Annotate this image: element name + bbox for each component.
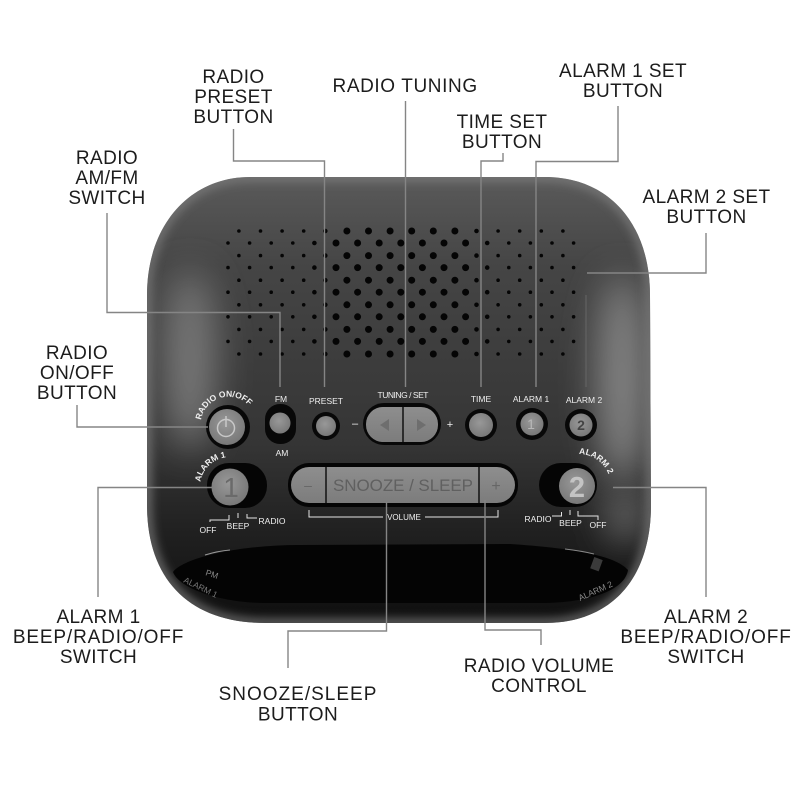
volume bracket	[309, 510, 498, 522]
button: radio on/off	[195, 390, 253, 449]
label: radio preset button: RADIO	[202, 67, 265, 88]
button: tuning/set: +	[447, 419, 453, 431]
label: time set button: TIME SET	[457, 112, 547, 133]
clock radio body	[147, 177, 651, 623]
button: alarm 2: 2	[577, 417, 585, 433]
label: radio am/fm switch: RADIO	[76, 148, 138, 169]
label: alarm 2 set button: ALARM 2 SET	[643, 187, 770, 208]
button: alarm 2	[565, 395, 602, 441]
label: alarm 1 switch: BEEP/RADIO/OFF	[13, 627, 184, 648]
label: radio volume control: CONTROL	[491, 676, 587, 697]
label: radio tuning: RADIO TUNING	[332, 76, 478, 97]
label: radio on/off button: RADIO	[46, 343, 108, 364]
switch: alarm 2	[525, 448, 614, 530]
label: radio preset button: BUTTON	[193, 107, 274, 128]
button: alarm 2: ALARM 2	[566, 395, 602, 405]
switch: alarm 2: RADIO	[525, 514, 552, 524]
switch: alarm 1: OFF	[200, 525, 216, 535]
label: radio am/fm switch: AM/FM	[75, 168, 139, 189]
switch: alarm 1: 1	[223, 472, 239, 503]
button: snooze/sleep and volume bar: –	[304, 477, 312, 493]
button: alarm 1: ALARM 1	[513, 394, 549, 404]
button: alarm 1: 1	[527, 416, 535, 432]
button: radio on/off: RADIO ON/OFF	[195, 390, 253, 420]
switch: radio FM/AM: AM	[276, 448, 288, 458]
label: snooze/sleep button: SNOOZE/SLEEP	[219, 684, 377, 705]
button: alarm 1	[513, 394, 549, 440]
label: time set button: BUTTON	[462, 132, 542, 153]
label: alarm 2 switch: BEEP/RADIO/OFF	[620, 627, 792, 648]
label: alarm 2 switch: ALARM 2	[664, 607, 748, 628]
switch: alarm 2: OFF	[590, 520, 606, 530]
speaker grille	[228, 231, 574, 356]
leader lines	[77, 101, 706, 668]
button: time: TIME	[471, 394, 491, 404]
switch: alarm 1: RADIO	[259, 516, 286, 526]
label: alarm 1 switch: ALARM 1	[56, 607, 141, 628]
button: snooze/sleep and volume bar	[288, 463, 518, 507]
switch: radio FM/AM	[265, 394, 296, 458]
switch: alarm 1: ALARM 1	[195, 452, 226, 482]
label: alarm 2 switch: SWITCH	[667, 647, 745, 668]
label: alarm 1 switch: SWITCH	[60, 647, 137, 668]
switch: alarm 2: 2	[569, 472, 585, 504]
button: preset: PRESET	[309, 396, 343, 406]
button: snooze/sleep and volume bar: SNOOZE / SLEEP	[333, 476, 473, 495]
display window: ALARM 2	[577, 579, 614, 603]
label: alarm 1 set button: ALARM 1 SET	[559, 61, 687, 82]
switch: radio FM/AM: FM	[275, 394, 287, 404]
button: snooze/sleep and volume bar: +	[491, 478, 501, 495]
button: tuning/set: TUNING / SET	[378, 390, 428, 400]
label: alarm 1 set button: BUTTON	[583, 81, 663, 102]
display window: ALARM 1	[182, 575, 219, 600]
button: tuning/set	[352, 390, 453, 445]
button: preset	[309, 396, 343, 440]
volume bracket: VOLUME	[387, 513, 421, 522]
label: radio volume control: RADIO VOLUME	[464, 656, 614, 677]
switch: alarm 2: BEEP	[559, 518, 582, 528]
button: time	[465, 394, 497, 441]
switch: alarm 2: ALARM 2	[579, 448, 614, 474]
label: snooze/sleep button: BUTTON	[258, 704, 338, 726]
label: alarm 2 set button: BUTTON	[666, 207, 747, 228]
label: radio on/off button: ON/OFF	[40, 363, 114, 384]
label: radio preset button: PRESET	[194, 87, 273, 108]
display window: PM	[204, 567, 220, 581]
switch: alarm 1: BEEP	[227, 521, 250, 531]
switch: alarm 1	[195, 452, 286, 535]
display window	[173, 544, 628, 603]
label: radio am/fm switch: SWITCH	[68, 188, 146, 209]
label: radio on/off button: BUTTON	[37, 383, 117, 404]
button: tuning/set: –	[352, 418, 359, 430]
